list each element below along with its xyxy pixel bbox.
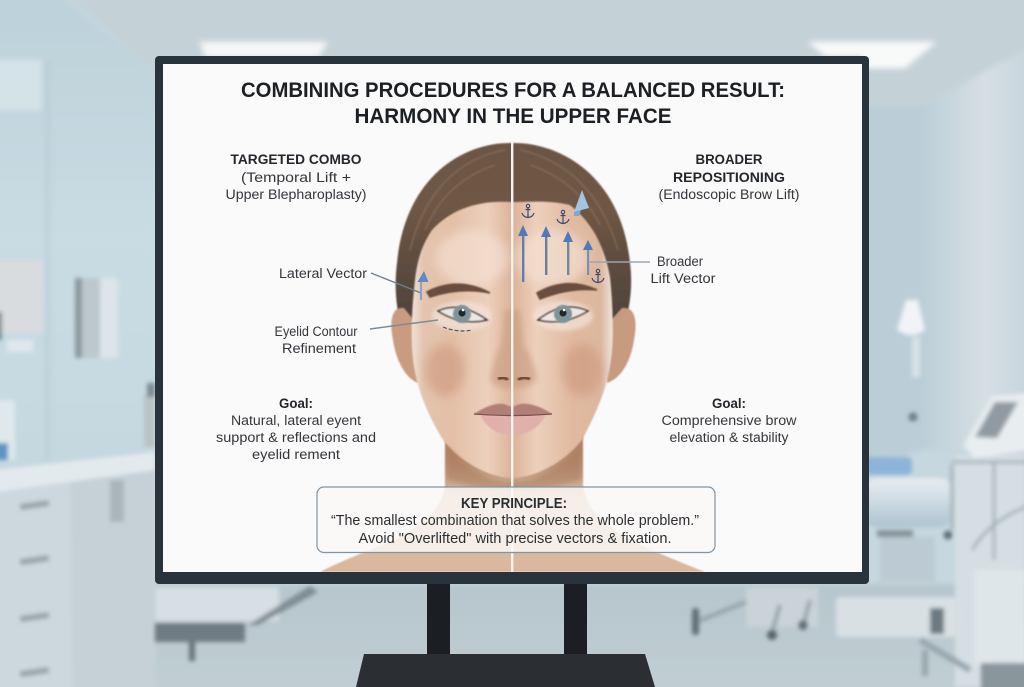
callout: key principle: KEY PRINCIPLE:: [461, 495, 567, 512]
left heading: targeted combo: (Temporal Lift +: [241, 170, 351, 185]
callout: key principle: “The smallest combination that solves the whole problem.”: [331, 512, 699, 529]
face skin: [412, 202, 613, 478]
left goal text: Natural, lateral eyent: [231, 413, 361, 428]
nose shadow: [490, 310, 537, 388]
nostrils: [498, 378, 530, 380]
right goal text: [662, 396, 797, 445]
label: broader lift vector: Broader: [657, 254, 703, 269]
left goal text: [216, 396, 376, 462]
right heading: broader repositioning: REPOSITIONING: [673, 170, 785, 185]
right heading: broader repositioning: [658, 152, 800, 202]
eye halo: [432, 301, 492, 331]
arrow: lateral vector: [418, 271, 428, 300]
left heading: targeted combo: TARGETED COMBO: [230, 152, 362, 167]
neck and shoulders: [320, 430, 705, 572]
hair back: [396, 143, 631, 332]
leader line: broader lift vector: [590, 261, 650, 263]
label: broader lift vector: [652, 256, 716, 283]
right goal text: Comprehensive brow: [662, 413, 797, 428]
floor furniture below the monitor: [155, 570, 1024, 687]
label: eyelid contour refinement: Eyelid Contour: [274, 324, 358, 339]
left heading: targeted combo: [226, 152, 366, 202]
right room equipment: lamp, bed, machine: [866, 300, 1024, 687]
wall dispensers: [0, 260, 118, 358]
lips: [474, 404, 552, 416]
title: [242, 82, 784, 123]
label: lateral vector: Lateral Vector: [279, 266, 368, 281]
leader line: lateral vector: [371, 273, 421, 293]
jaw shading under chin: [447, 445, 581, 490]
right heading: broader repositioning: (Endoscopic Brow Lift): [658, 187, 800, 202]
right goal text: Goal:: [712, 396, 746, 411]
label: eyelid contour refinement: Refinement: [282, 341, 356, 356]
callout: key principle: Avoid "Overlifted" with precise vectors & fixation.: [358, 530, 672, 547]
monitor frame: [155, 56, 869, 584]
left heading: targeted combo: Upper Blepharoplasty): [226, 187, 366, 202]
title: COMBINING PROCEDURES FOR A BALANCED RESULT:: [241, 79, 785, 102]
eyebrows: [427, 284, 490, 297]
callout: key principle: [317, 487, 715, 552]
left goal text: eyelid rement: [252, 447, 340, 462]
anchor icons: [522, 204, 604, 282]
left cabinet and counter: [0, 383, 155, 687]
arrows: broader lift vector: [518, 225, 593, 282]
title: HARMONY IN THE UPPER FACE: [354, 105, 672, 128]
hair strands: [410, 150, 618, 250]
label: eyelid contour refinement: [276, 326, 358, 353]
forehead highlight: [436, 230, 508, 286]
label: broader lift vector: Lift Vector: [650, 271, 716, 286]
icon: large blue pointer arrow: [574, 190, 589, 216]
monitor screen panel: [163, 64, 862, 572]
eyelid contour dashes: [443, 327, 472, 331]
monitor stand: [356, 584, 655, 687]
leader line: eyelid contour: [370, 320, 438, 329]
left goal text: Goal:: [279, 396, 313, 411]
eyes: [438, 308, 487, 322]
cheek blush: [425, 344, 465, 396]
ears: [391, 308, 422, 383]
portrait of face with split line: [320, 143, 705, 572]
right heading: broader repositioning: BROADER: [696, 152, 763, 167]
centre dividing line: [511, 140, 513, 572]
right goal text: elevation & stability: [670, 430, 789, 445]
left goal text: support & reflections and: [216, 430, 376, 445]
